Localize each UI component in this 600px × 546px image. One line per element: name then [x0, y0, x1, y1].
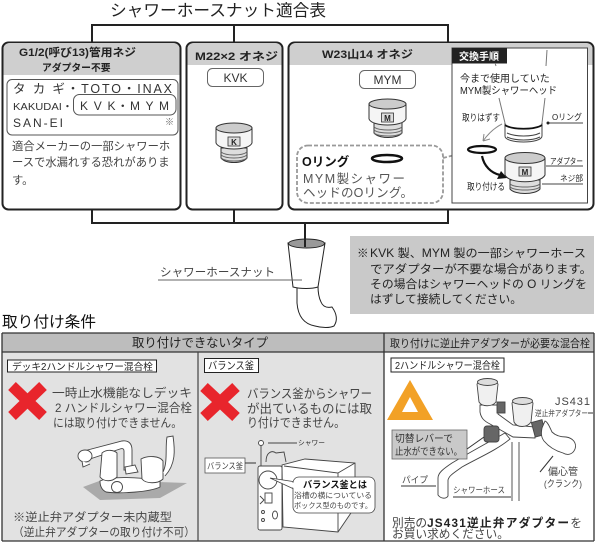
label: pipe: パイプ — [402, 475, 428, 485]
note: check valve not built in — [13, 510, 195, 539]
panel: M22x2 thread — [186, 42, 282, 210]
icon: KVK adapter — [216, 123, 252, 162]
note: check valve not built in: （逆止弁アダプターの取り付け不可） — [13, 525, 195, 539]
label: crank: 偏心管 — [548, 465, 578, 478]
label: balance boiler pointer — [205, 458, 256, 473]
title: シャワーホースナット適合表 — [110, 2, 326, 20]
note: leak warning: 適合メーカーの一部シャワーホ — [12, 139, 170, 153]
icon: O-ring removed — [468, 146, 496, 153]
note: leak warning: す。 — [12, 174, 33, 187]
label: shower hose nut: シャワーホースナット — [160, 266, 275, 279]
text: deck faucet warning — [52, 385, 192, 430]
illustration: deck faucet — [78, 436, 187, 500]
label: JS431 adapter: JS431 — [555, 396, 590, 408]
note box: その場合はシャワーヘッドの O リングを — [370, 277, 587, 291]
icon: MYM adapter: M — [384, 114, 391, 123]
table: installation conditions — [2, 333, 594, 541]
column: 2-handle faucet — [387, 358, 593, 541]
panel: W23 thread — [288, 42, 594, 210]
maker list box: ※ — [165, 117, 174, 127]
column: deck faucet: デッキ2ハンドルシャワー混合栓 — [12, 360, 153, 373]
label: attach: 取り付ける — [467, 182, 505, 193]
callout: what is a balance boiler — [270, 477, 375, 513]
heading: M22x2: M22×2 オネジ — [195, 50, 278, 63]
panel: W23 thread: MYM — [374, 73, 402, 87]
icon: adapter — [505, 152, 545, 194]
panel: G1/2 thread — [2, 42, 180, 210]
arrow: remove — [483, 124, 502, 141]
text: buy adapter — [392, 516, 582, 541]
panel: M22x2 thread: KVK — [223, 71, 248, 85]
label: shower hose: シャワーホース — [453, 485, 505, 495]
illustration: balance boiler — [258, 440, 355, 532]
callout: O-ring: ヘッドのOリング。 — [303, 186, 413, 200]
label: balance boiler — [204, 358, 258, 372]
label: steps heading — [452, 48, 507, 64]
note box: ※ — [357, 247, 369, 260]
note box — [350, 236, 594, 314]
column: balance boiler: バランス釜 — [208, 359, 254, 372]
label: MYM — [360, 70, 416, 88]
text: buy adapter: お買い求めください。 — [392, 528, 509, 541]
bottom bracket — [92, 210, 448, 245]
label: crank — [540, 456, 582, 490]
label: thread part — [542, 174, 583, 184]
callout: O-ring: Oリング — [302, 154, 350, 169]
label: remove: 取りはずす — [462, 113, 500, 124]
icon: KVK adapter: K — [231, 138, 237, 147]
illustration: wall faucet — [438, 378, 576, 501]
callout: what is a balance boiler: 浴槽の横についている — [294, 490, 372, 500]
column: balance boiler — [204, 358, 375, 532]
label: thread part: ネジ部 — [560, 174, 583, 183]
icon: MYM adapter — [369, 99, 406, 138]
label: crank: (クランク) — [544, 479, 582, 490]
text: current shower head: 今まで使用していた — [460, 72, 550, 85]
label: O-ring — [546, 112, 583, 124]
label: adapter part: アダプター — [550, 156, 583, 166]
illustration: shower hose nut — [288, 223, 336, 328]
maker list box — [7, 80, 178, 135]
label: JS431 adapter: 逆止弁アダプター — [535, 408, 588, 418]
heading: G1/2: G1/2(呼び13)管用ネジ — [19, 45, 136, 59]
text: deck faucet warning: には取り付けできません。 — [53, 416, 182, 430]
panel: replacement steps — [452, 48, 588, 203]
callout: O-ring: MYM製シャワー — [303, 172, 405, 186]
callout: what is a balance boiler: ボックス型のものです。 — [294, 501, 372, 510]
column: 2-handle faucet: 2ハンドルシャワー混合栓 — [395, 359, 501, 372]
label: KVK — [208, 68, 264, 86]
heading: not installable: 取り付けできないタイプ — [132, 336, 269, 350]
maker list box: SAN-EI — [13, 116, 63, 130]
label: deck faucet — [8, 360, 156, 372]
text: balance boiler warning: が出ているものには取 — [247, 401, 373, 416]
label: lever warning: 止水ができない。 — [395, 445, 462, 458]
icon: red cross — [204, 387, 236, 417]
panel: replacement steps: 交換手順 — [459, 50, 499, 63]
arrow: attach — [482, 156, 507, 179]
label: JS431 adapter — [535, 396, 593, 418]
label: balance boiler pointer: バランス釜 — [207, 460, 243, 471]
text: balance boiler warning: バランス釜からシャワー — [247, 387, 372, 401]
heading: installation conditions: 取り付け条件 — [2, 313, 96, 331]
maker list box: タ カ ギ・TOTO・INAX — [13, 82, 173, 96]
text: balance boiler warning: り付けできません。 — [247, 416, 345, 430]
heading: W23: W23山14 オネジ — [322, 48, 413, 61]
label: O-ring: Oリング — [552, 112, 582, 122]
top bracket — [92, 25, 448, 42]
column: deck faucet — [8, 360, 195, 539]
text: buy adapter: 別売のJS431逆止弁アダプターを — [392, 516, 582, 530]
label: lever warning: 切替レバーで — [395, 432, 453, 445]
text: balance boiler warning — [247, 387, 373, 430]
text: deck faucet warning: 一時止水機能なしデッキ — [52, 385, 192, 400]
label: shower: シャワー — [298, 439, 325, 447]
label: 2-handle faucet — [391, 358, 504, 372]
maker list box: K V K・M Y M — [80, 99, 169, 113]
subheading: adapter not needed: アダプター不要 — [42, 61, 111, 74]
label: lever warning — [392, 430, 484, 459]
text: deck faucet warning: 2 ハンドルシャワー混合栓 — [55, 400, 192, 415]
icon: orange triangle — [387, 380, 433, 420]
note box: はずして接続してください。 — [370, 292, 522, 306]
note: check valve not built in: ※逆止弁アダプター未内蔵型 — [13, 510, 172, 524]
icon: red cross — [12, 386, 43, 416]
note: leak warning: ースで水漏れする恐れがありま — [12, 155, 170, 169]
note box: でアダプターが不要な場合があります。 — [370, 262, 592, 276]
icon: adapter: M — [522, 168, 529, 177]
note box: KVK 製、MYM 製の一部シャワーホース — [370, 246, 586, 260]
text: current shower head: MYM製シャワーヘッド — [460, 84, 557, 97]
callout: O-ring — [297, 146, 466, 203]
label: shower — [268, 439, 325, 447]
label: adapter part — [546, 156, 583, 166]
callout: what is a balance boiler: バランス釜とは — [303, 479, 367, 491]
maker list box: KAKUDAI・ — [13, 101, 73, 113]
diagram: shower head — [495, 50, 547, 142]
